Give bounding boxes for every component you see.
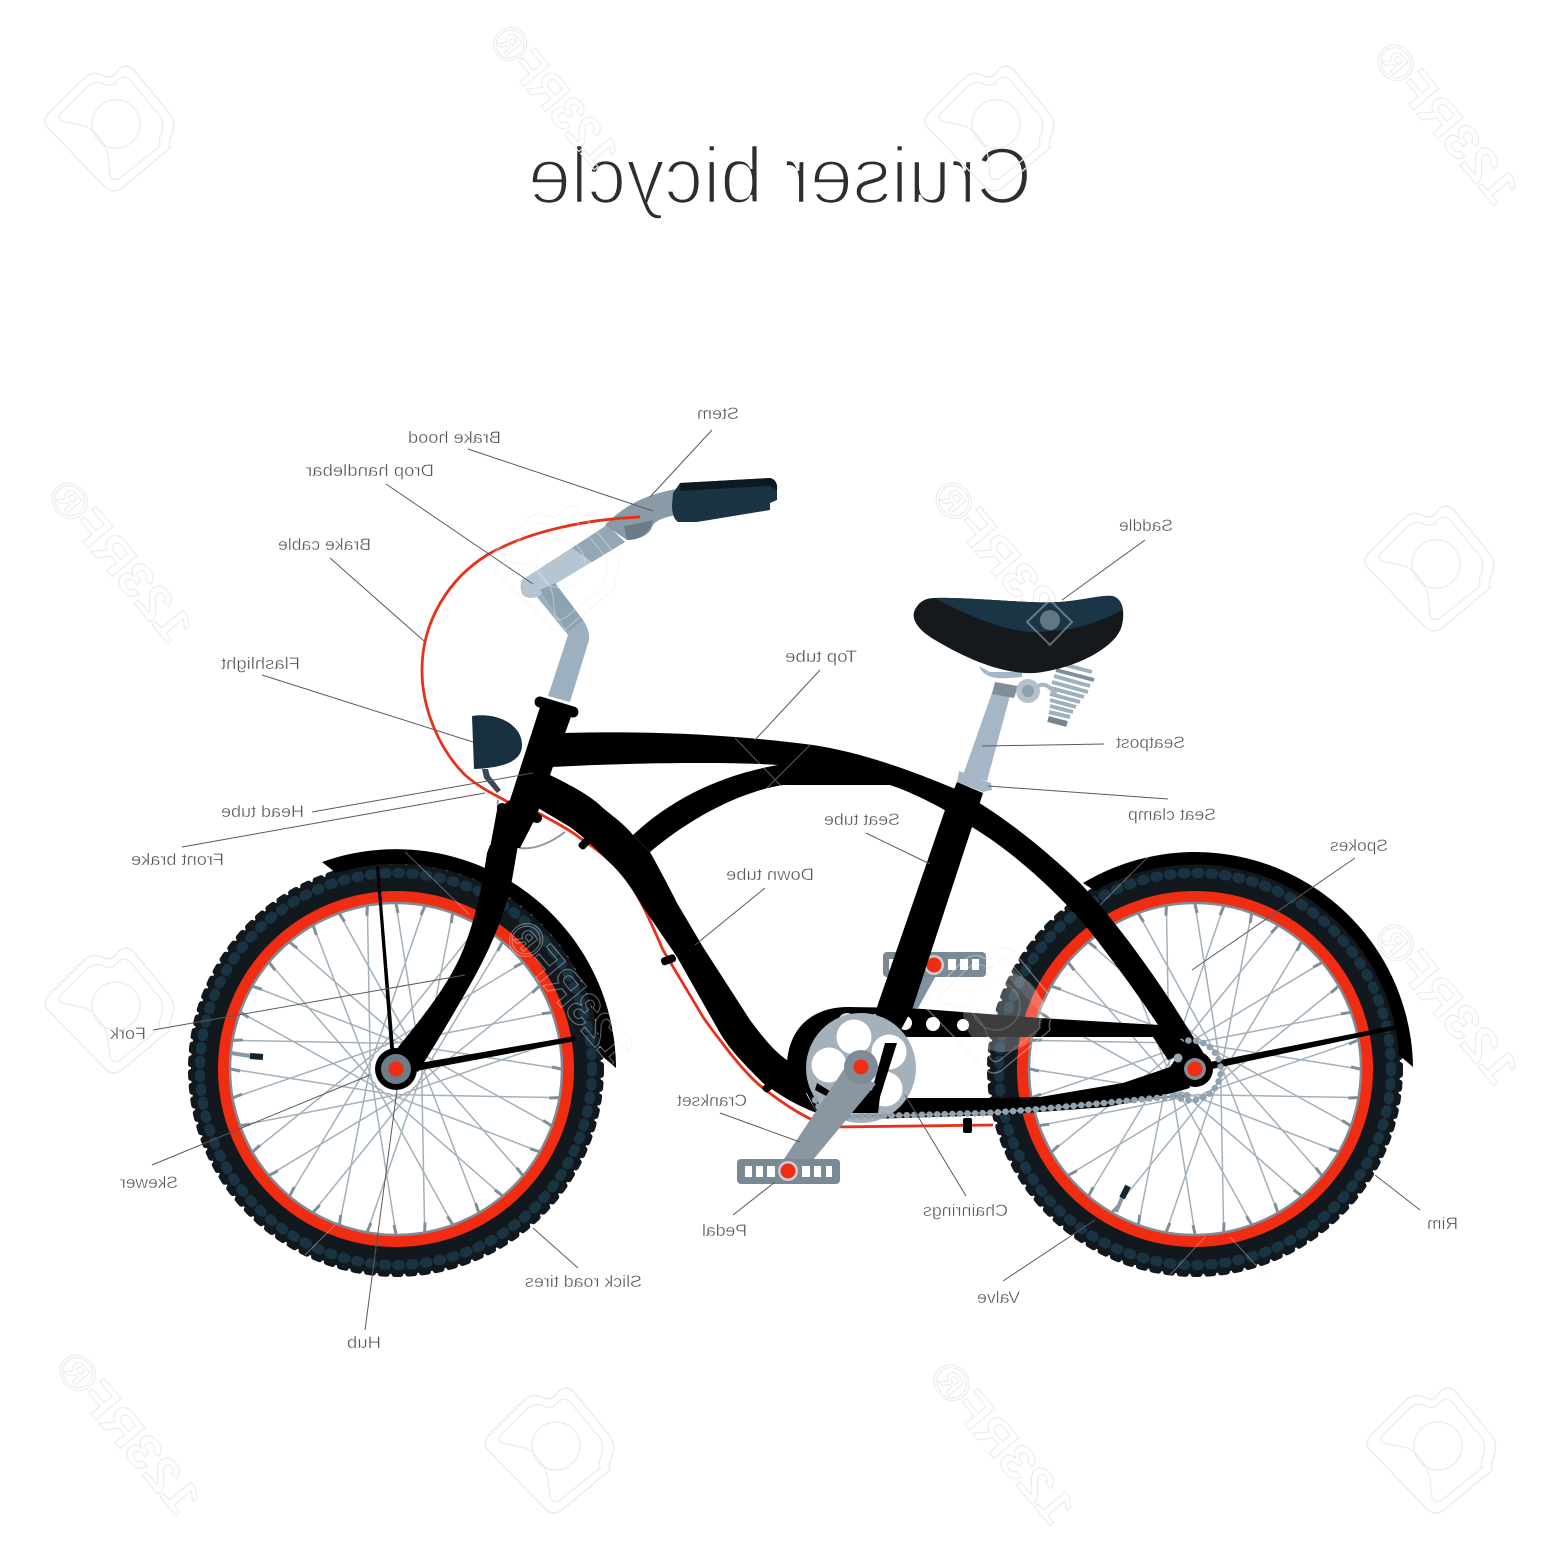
label: Drop handlebar: [306, 461, 533, 584]
fork: [391, 845, 518, 1072]
label: Down tube: Down tube: [726, 865, 814, 884]
rear fender: [1083, 852, 1413, 1067]
handlebar stem: [537, 583, 589, 702]
chain: [815, 1095, 1190, 1117]
rear sprocket: [1170, 1040, 1221, 1100]
front hub: [375, 1048, 417, 1090]
label: Fork: [109, 975, 465, 1043]
label: Pedal: Pedal: [702, 1221, 747, 1240]
chainring: [806, 1013, 916, 1123]
label: Slick road tires: [525, 1228, 642, 1291]
lower crank arm: [782, 1066, 876, 1166]
frame: down tube: [538, 775, 817, 1113]
upper pedal: [883, 952, 986, 977]
label: Head tube: Head tube: [221, 802, 304, 821]
front wheel: [191, 864, 601, 1274]
upper crank arm: [896, 972, 938, 1008]
watermark text group: 123RF®: [918, 1352, 1084, 1535]
label: Rim: Rim: [1427, 1214, 1458, 1233]
rear hub: [1174, 1051, 1213, 1087]
label: Front brake: [131, 793, 485, 869]
flashlight: [472, 715, 522, 793]
front fender: [322, 849, 616, 1068]
label: Saddle: Saddle: [1119, 516, 1173, 535]
chain guard holes: [838, 1013, 969, 1031]
label: Head tube: [221, 773, 533, 821]
head tube: [490, 702, 573, 848]
label: Valve: Valve: [977, 1288, 1020, 1307]
label: Seat tube: Seat tube: [824, 810, 900, 829]
label: Skewer: Skewer: [120, 1173, 178, 1192]
label: Down tube: [695, 865, 814, 945]
label: Seat clamp: [988, 786, 1216, 824]
label: Chainrings: [905, 1095, 1008, 1220]
fender stays: [376, 866, 1398, 1071]
red brake cable: [422, 517, 993, 1127]
label: Spokes: [1192, 836, 1388, 970]
label: Flashlight: [221, 654, 473, 742]
label: Stem: [650, 404, 739, 497]
label: Crankset: [677, 1091, 800, 1142]
watermark text group: 123RF®: [478, 15, 628, 179]
rear valve: [1116, 1186, 1128, 1212]
label: Skewer: [120, 1075, 370, 1192]
drop handlebar: [520, 525, 625, 632]
title: Cruiser bicycle: [528, 131, 1032, 220]
label: Rim: [1375, 1175, 1458, 1233]
frame: seat tube: [862, 782, 983, 1098]
frame: top tube, brace, seat stay: [552, 732, 1208, 1060]
front brake cable: [498, 800, 565, 848]
label: Brake cable: Brake cable: [278, 535, 371, 554]
watermark overlays on the bicycle: 123RF®: [494, 911, 644, 1075]
label: Spokes: Spokes: [1330, 836, 1388, 855]
crank boss: [844, 1050, 878, 1084]
front valve: [231, 1053, 263, 1057]
label: Brake hood: [408, 428, 653, 511]
label: Hub: [347, 1090, 397, 1352]
saddle clamp: [979, 666, 1056, 703]
label: Top tube: Top tube: [785, 647, 857, 666]
label: Front brake: Front brake: [131, 850, 224, 869]
watermark text group: 123RF®: [920, 470, 1086, 653]
label: Drop handlebar: Drop handlebar: [306, 461, 434, 480]
watermark overlays on the bicycle: [305, 506, 1265, 1275]
saddle: [914, 596, 1123, 673]
label: Stem: Stem: [697, 404, 739, 423]
label: Crankset: Crankset: [677, 1091, 747, 1110]
label: Flashlight: Flashlight: [221, 654, 300, 673]
frame: chain stay upper: [787, 1007, 1195, 1095]
lower pedal: [737, 1159, 840, 1184]
saddle spring: [1048, 664, 1094, 724]
label: Brake cable: [278, 535, 424, 641]
watermark text group: 123RF®: [1362, 912, 1528, 1095]
seatpost: [957, 682, 1018, 792]
label: Seatpost: Seatpost: [1116, 733, 1185, 752]
brake hood: [605, 489, 677, 540]
label: Pedal: [702, 1182, 775, 1240]
rear wheel: [990, 864, 1400, 1274]
handlebar grip: [672, 478, 777, 522]
watermark text group: 123RF®: [36, 470, 202, 653]
label: Chainrings: Chainrings: [923, 1201, 1008, 1220]
cable clips: [577, 835, 972, 1133]
label: Slick road tires: Slick road tires: [525, 1272, 642, 1291]
label: Top tube: [755, 647, 857, 740]
label: Brake hood: Brake hood: [408, 428, 501, 447]
label: Seat clamp: Seat clamp: [1128, 805, 1216, 824]
watermark text group: 123RF®: [44, 1342, 210, 1525]
frame: chain stay lower: [800, 1055, 1190, 1120]
label: Fork: Fork: [109, 1024, 146, 1043]
watermark text group: 123RF®: [1362, 32, 1528, 215]
label: Valve: [977, 1220, 1095, 1307]
label: Hub: Hub: [347, 1333, 381, 1352]
label: Seat tube: [824, 810, 930, 864]
label: Saddle: [1062, 516, 1173, 600]
